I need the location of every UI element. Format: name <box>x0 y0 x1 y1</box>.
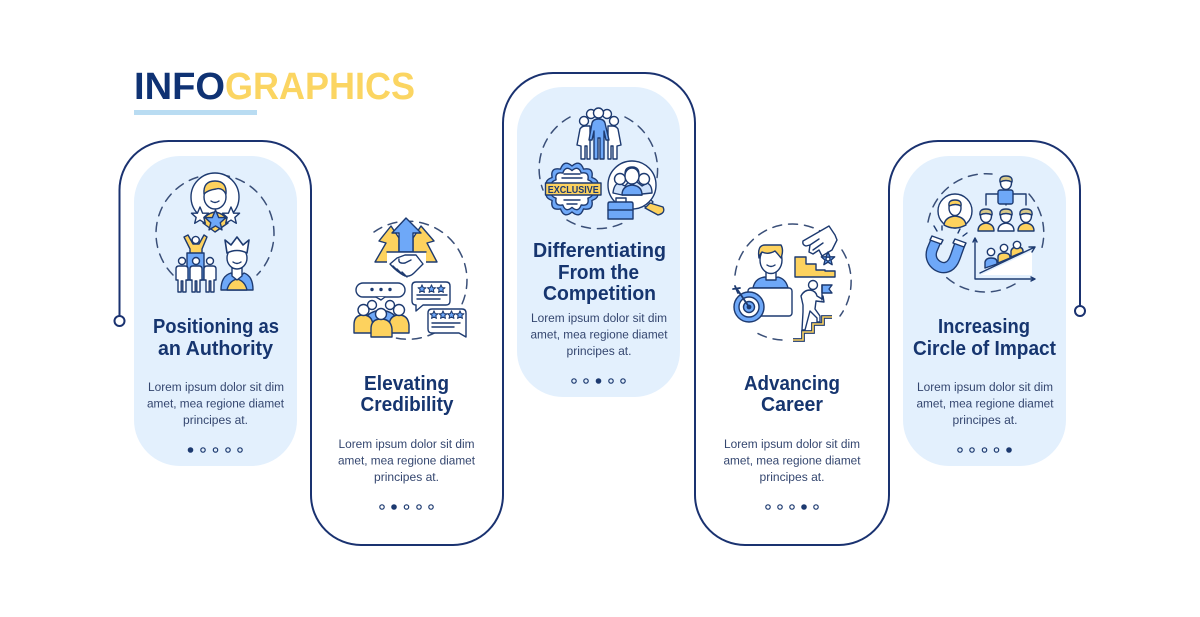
panel: advancing career <box>724 224 861 509</box>
body text: Lorem ipsum dolor sit dim <box>531 311 667 325</box>
body text <box>147 380 285 427</box>
body text <box>724 437 861 484</box>
pagination dots <box>188 448 242 452</box>
body text: Lorem ipsum dolor sit dim <box>724 437 860 451</box>
icon: career <box>733 224 851 340</box>
pagination dots <box>766 505 818 509</box>
heading: From the <box>558 262 639 284</box>
heading: Increasing <box>938 316 1030 338</box>
heading: Elevating <box>364 373 449 395</box>
body text: amet, mea regione diamet <box>338 454 476 468</box>
panel: elevating credibility <box>338 218 476 509</box>
body text: amet, mea regione diamet <box>147 396 285 410</box>
body text: principes at. <box>183 413 248 427</box>
title: GRAPHICS <box>225 66 415 108</box>
heading: Circle of Impact <box>913 338 1056 360</box>
body text: Lorem ipsum dolor sit dim <box>338 437 474 451</box>
panel: differentiating from the competition <box>530 108 668 383</box>
heading: Credibility <box>360 394 454 416</box>
heading <box>744 373 840 416</box>
body text: amet, mea regione diamet <box>916 396 1054 410</box>
body text <box>530 311 668 358</box>
body text: principes at. <box>566 344 632 358</box>
title <box>134 66 415 115</box>
pagination dots <box>958 448 1011 452</box>
panel: increasing circle of impact <box>913 174 1056 452</box>
heading <box>913 316 1056 360</box>
panel backgrounds <box>134 87 1066 466</box>
body text: amet, mea regione diamet <box>724 454 861 468</box>
heading: Advancing <box>744 373 840 395</box>
title: INFO <box>134 66 225 108</box>
heading <box>153 316 279 360</box>
heading <box>360 373 454 416</box>
body text <box>338 437 476 484</box>
icon: competition <box>539 108 664 229</box>
panel: positioning as an authority <box>147 173 285 452</box>
heading: Competition <box>543 283 656 305</box>
body text: principes at. <box>760 470 824 484</box>
heading: an Authority <box>158 338 274 360</box>
heading: Differentiating <box>533 240 666 262</box>
icon: authority <box>156 173 274 292</box>
icon: credibility <box>354 218 467 339</box>
pagination dots <box>572 379 625 383</box>
heading <box>533 240 666 305</box>
pagination dots <box>380 505 433 509</box>
body text: principes at. <box>952 413 1018 427</box>
connecting outline <box>114 73 1085 545</box>
heading: Positioning as <box>153 316 279 338</box>
heading: Career <box>761 394 823 416</box>
body text: Lorem ipsum dolor sit dim <box>917 380 1053 394</box>
body text: principes at. <box>374 470 439 484</box>
body text: Lorem ipsum dolor sit dim <box>148 380 284 394</box>
body text <box>916 380 1054 427</box>
icon: impact <box>928 174 1044 292</box>
icon: competition: EXCLUSIVE <box>548 184 599 196</box>
body text: amet, mea regione diamet <box>530 328 668 342</box>
